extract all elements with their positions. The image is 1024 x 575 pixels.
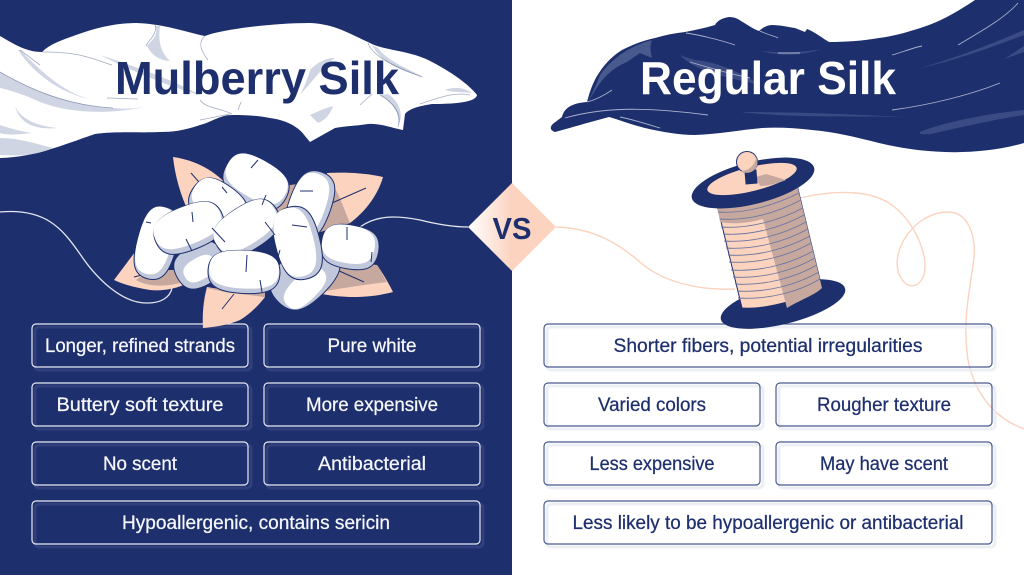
item: Longer, refined strands [45, 336, 235, 357]
item: Buttery soft texture [56, 395, 224, 416]
cocoon: left [147, 194, 231, 262]
cocoon: centre right [268, 202, 328, 284]
cocoon: right top [278, 165, 342, 245]
spool body [717, 185, 822, 308]
cocoon: lower right, shaded [260, 230, 350, 320]
thread windings [718, 193, 820, 298]
item: Shorter fibers, potential irregularities [614, 336, 922, 357]
cocoon: top [215, 145, 297, 219]
leaf shadows and veins [136, 180, 387, 297]
item: Less likely to be hypoallergenic or antibacterial [572, 513, 964, 534]
cocoon: centre [206, 190, 288, 266]
title: Regular Silk: Regular Silk [640, 52, 896, 104]
box shadows [35, 327, 483, 547]
item: No scent [103, 454, 178, 475]
panel: regular silk background [512, 0, 1024, 575]
bottom flange [716, 269, 850, 339]
illustration: navy silk fabric [551, 0, 1024, 152]
stem and knob [744, 170, 758, 184]
illustration: thread spool [687, 147, 850, 339]
illustration: white silk fabric [0, 23, 477, 158]
title: Mulberry Silk: Mulberry Silk [115, 52, 399, 104]
item: Pure white [328, 336, 416, 357]
item: May have scent [820, 454, 949, 475]
illustration: mulberry leaves and cocoons [114, 145, 393, 328]
cocoon: right [318, 220, 382, 274]
item: Antibacterial [318, 454, 426, 475]
item: Hypoallergenic, contains sericin [122, 513, 390, 534]
thread: white, left [0, 211, 468, 303]
box shadows [547, 327, 995, 547]
thread: peach, right [556, 192, 1024, 429]
spool shadow [717, 185, 822, 308]
cocoon: upper left [181, 170, 255, 240]
leaves [114, 157, 393, 328]
item: More expensive [306, 395, 438, 416]
item: Varied colors [598, 395, 706, 416]
panel: mulberry silk background [0, 0, 512, 575]
cocoon creases [146, 160, 372, 292]
item: Less expensive [590, 454, 714, 475]
cocoon: left back, shaded [167, 234, 233, 296]
top flange [687, 147, 819, 219]
list: regular silk attributes [544, 324, 995, 547]
item: Rougher texture [817, 395, 951, 416]
cocoon: bottom [207, 249, 281, 295]
cocoon: far left [128, 202, 186, 284]
badge: VS diamond: VS [492, 211, 532, 246]
badge: VS diamond [468, 183, 556, 271]
list: mulberry silk attributes [32, 324, 483, 547]
